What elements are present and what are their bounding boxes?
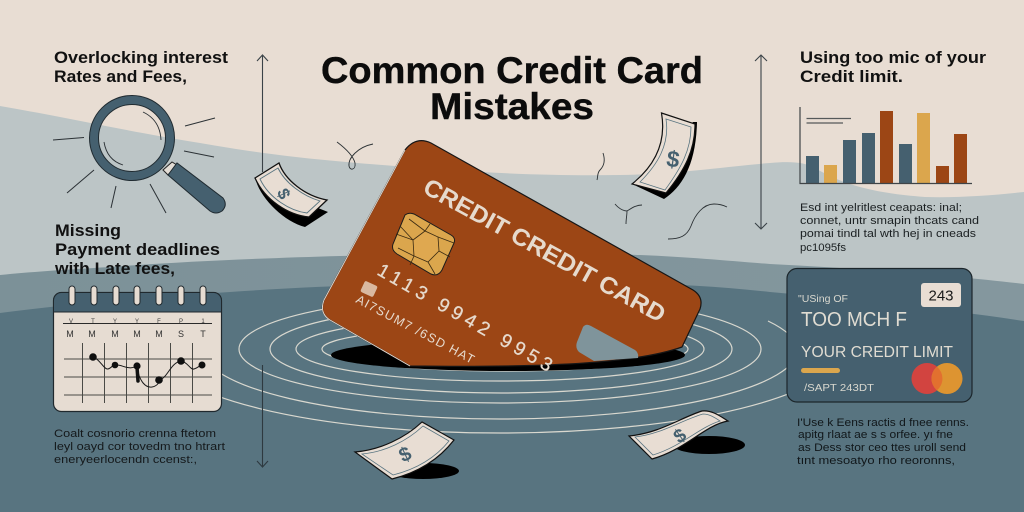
title	[321, 50, 703, 127]
credit card	[322, 141, 701, 376]
icon: calendar chart: M	[155, 329, 163, 339]
heading: missing payment deadlines: Missing	[55, 222, 121, 240]
heading: overlooking interest: Rates and Fees,	[54, 68, 187, 86]
bill: lower left	[355, 422, 459, 479]
card number: 1113 9942 9953	[374, 260, 556, 376]
text block: card caption: tınt mesoatyo rho reoronns,	[797, 455, 955, 467]
bill: upper left	[255, 163, 328, 227]
icon: calendar chart: P	[179, 319, 183, 325]
text block: chart caption: Esd int yelritlest ceapats: inal;	[800, 202, 962, 214]
text block: card caption: as Dess stor ceo ttes uroll send	[798, 442, 966, 454]
card holder: AI7SUM7 /6SD HAT	[354, 292, 477, 367]
text block: calendar caption: leyl oayd cor tovedm tno htrart	[54, 441, 225, 453]
text block: chart caption: pc1095fs	[800, 242, 846, 254]
hole shadow	[331, 339, 685, 371]
icon: calendar chart: V	[69, 319, 73, 325]
text block: chart caption: connet, untr smapin thcats cand	[800, 215, 979, 227]
icon: calendar chart: M	[66, 329, 74, 339]
mastercard-style logo	[912, 363, 962, 394]
text block: card caption: apitg rlaat ae s s orfee. yı fne	[798, 429, 953, 441]
arrow: left top	[257, 55, 268, 172]
heading: using too much: Credit limit.	[800, 68, 903, 86]
icon: calendar chart: Y	[113, 319, 117, 325]
icon: calendar chart: S	[178, 329, 184, 339]
icon: calendar chart: M	[133, 329, 141, 339]
heading: missing payment deadlines	[54, 222, 220, 278]
icon: calendar chart: T	[200, 329, 206, 339]
text block: calendar caption: Coalt cosnorio crenna ftetom	[54, 428, 216, 440]
card code badge	[921, 283, 961, 307]
bill: upper left: $	[273, 185, 294, 203]
bill: lower right	[629, 411, 745, 459]
card logo	[360, 281, 378, 297]
bill: lower right: $	[670, 425, 691, 448]
ripple rings	[159, 295, 841, 433]
text block: card caption	[797, 417, 969, 467]
icon: calendar chart: M	[111, 329, 119, 339]
text block: calendar caption	[54, 428, 225, 466]
card stripe	[576, 325, 638, 361]
payment card panel: TOO MCH F	[801, 309, 907, 331]
bill: upper right	[632, 113, 697, 199]
icon: calendar chart: M	[88, 329, 96, 339]
title: Common Credit Card	[321, 50, 703, 91]
text block: chart caption	[800, 202, 979, 254]
heading: missing payment deadlines: with Late fees,	[54, 260, 175, 278]
arrow: left bottom	[257, 365, 268, 467]
payment card panel	[787, 268, 972, 402]
icon: magnifying glass	[53, 96, 225, 213]
heading: overlooking interest: Overlocking interest	[54, 49, 229, 67]
icon: calendar chart: T	[91, 319, 95, 325]
payment card panel: YOUR CREDIT LIMIT	[801, 344, 954, 361]
chip	[392, 213, 455, 275]
card code badge: 243	[928, 288, 954, 304]
payment card panel: /SAPT 243DT	[804, 382, 875, 394]
heading: missing payment deadlines: Payment deadlines	[55, 241, 220, 259]
icon: calendar chart: Y	[135, 319, 139, 325]
heading: overlooking interest	[54, 49, 229, 86]
bar chart	[800, 107, 972, 184]
text block: calendar caption: eneryeerlocendn ccenst:,	[54, 454, 197, 466]
bill: lower left: $	[396, 443, 415, 467]
text block: card caption: I'Use k Eens ractis d fnee renns.	[797, 417, 969, 429]
heading: using too much	[800, 49, 987, 86]
heading: using too much: Using too mic of your	[800, 49, 987, 67]
title: Mistakes	[430, 86, 594, 127]
icon: calendar chart: 1	[201, 319, 205, 325]
icon: calendar chart: F	[157, 319, 161, 325]
card label: CREDIT CREDIT CARD	[419, 174, 670, 328]
arrow: right double	[755, 55, 767, 229]
bill: upper right: $	[665, 145, 681, 173]
payment card panel: "USing OF	[798, 293, 848, 305]
doodle squiggles	[337, 142, 727, 239]
icon: calendar chart	[54, 286, 222, 412]
text block: chart caption: pomai tindl tal wth hej in cneads	[800, 228, 976, 240]
